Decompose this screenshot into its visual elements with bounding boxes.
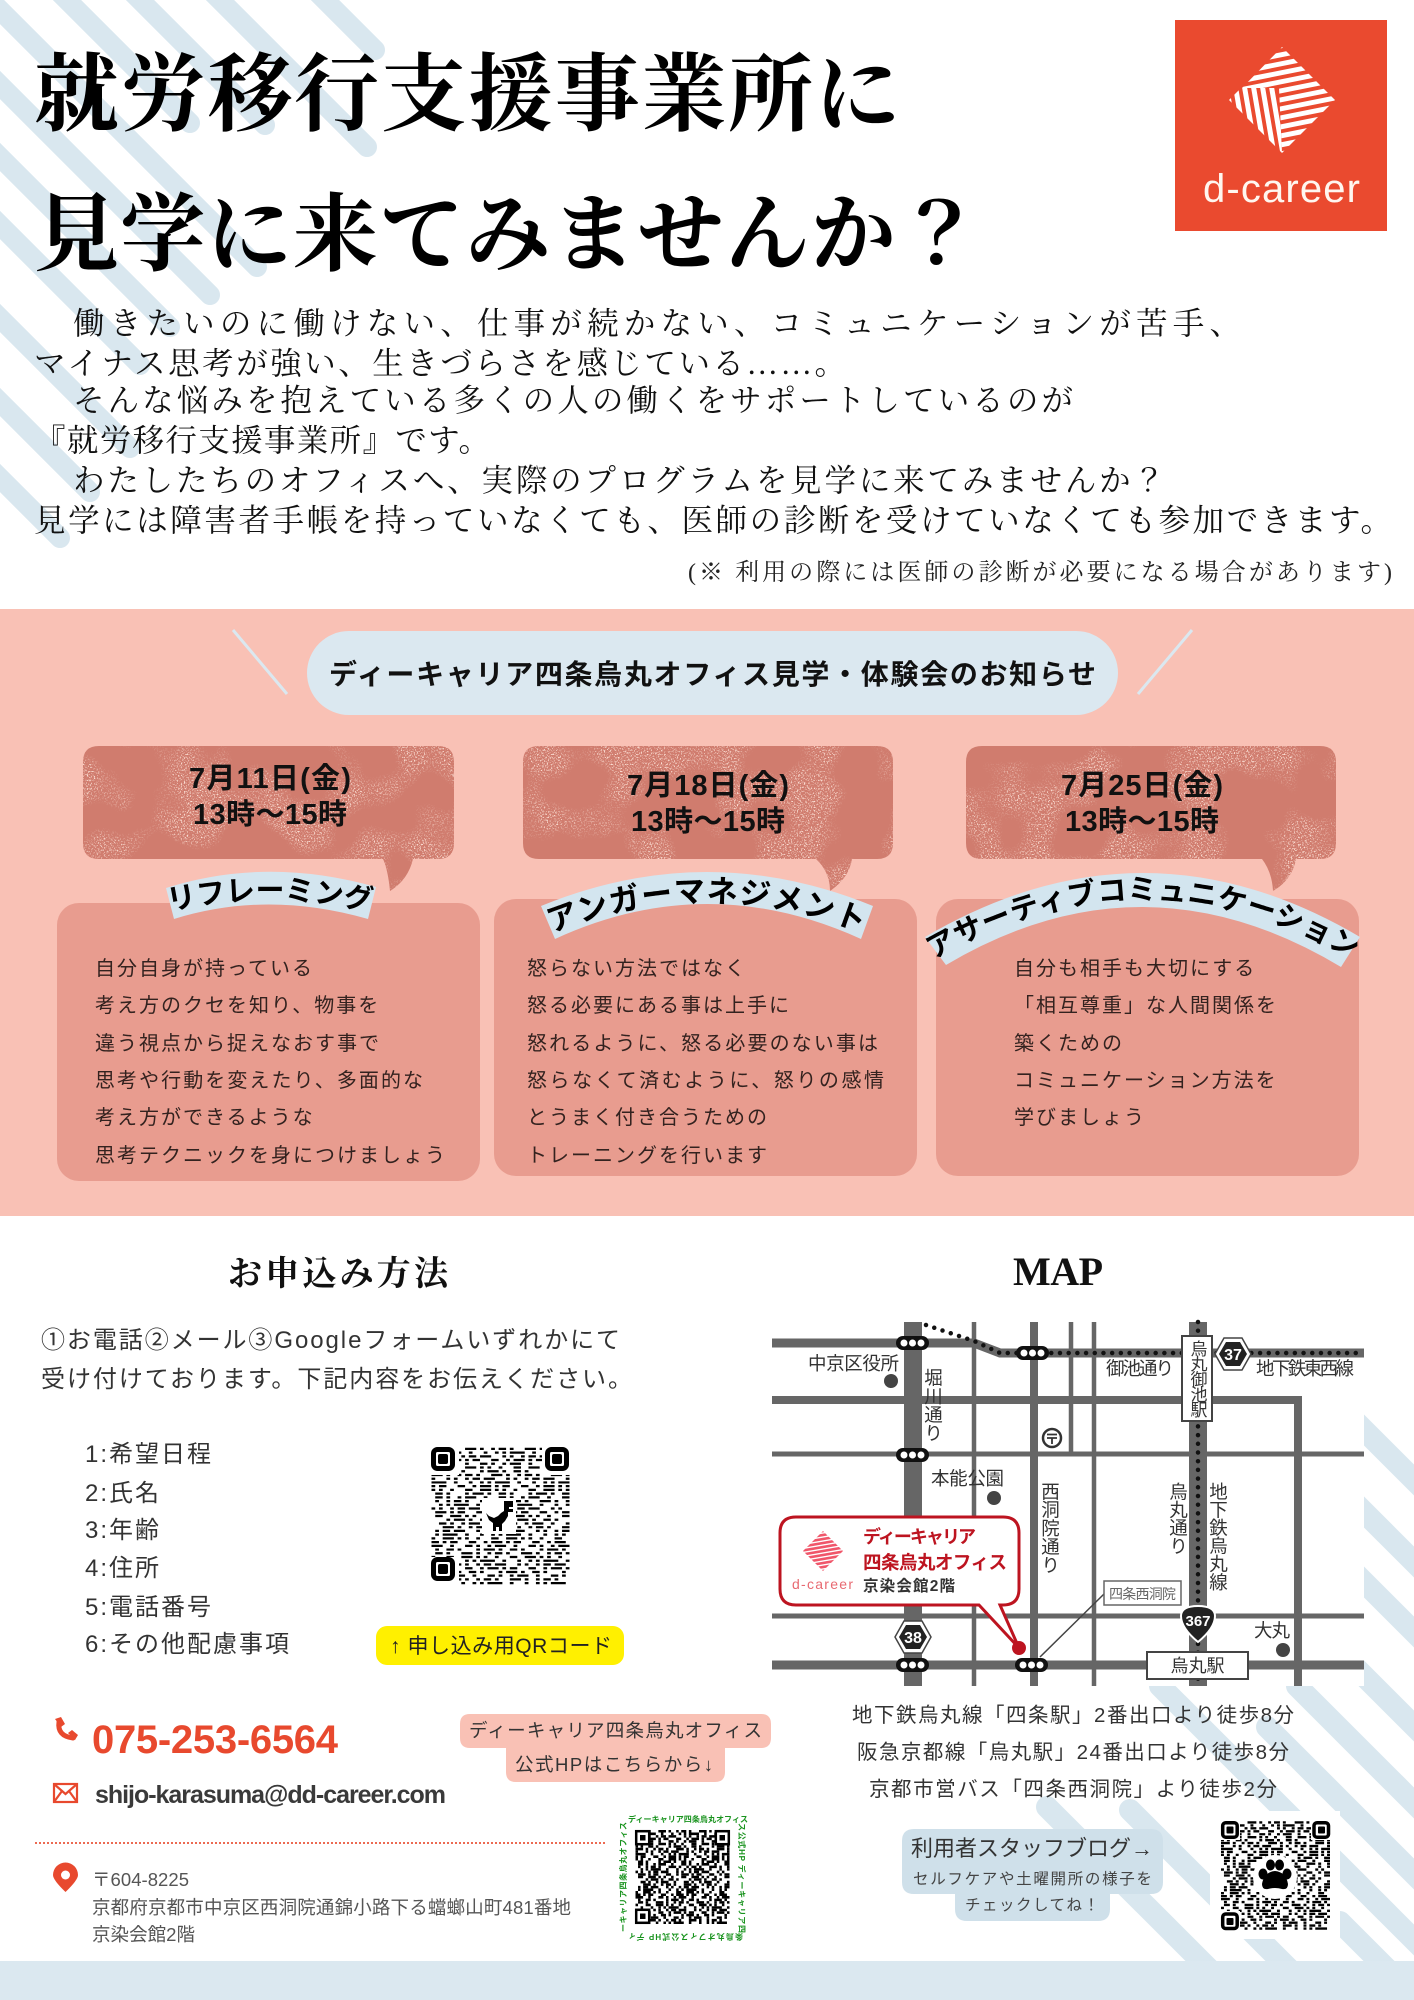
list of required details: 3:年齢 [85, 1517, 161, 1544]
date bubble 2 [520, 744, 900, 894]
list of required details: 2:氏名 [85, 1480, 161, 1507]
route marker 367 [1181, 1606, 1215, 1642]
callout: office location: 四条烏丸オフィス [863, 1552, 1007, 1573]
logo: d-career [1175, 20, 1387, 231]
title [34, 49, 982, 283]
icon: paw [1253, 1855, 1297, 1899]
route marker 37 [1215, 1338, 1251, 1370]
icon: dinosaur [486, 1501, 513, 1531]
apply instructions [41, 1327, 632, 1393]
blue tag: staff blog [902, 1829, 1163, 1921]
heading: how to apply: お申込み方法 [228, 1255, 451, 1293]
card text: 怒らない方法ではなく [527, 957, 747, 980]
heading: map: MAP [1013, 1249, 1103, 1294]
card 2: anger management [494, 872, 917, 1176]
card text: 怒らなくて済むように、怒りの感情 [527, 1069, 886, 1092]
date bubble 3 [960, 744, 1340, 894]
map labels: 堀川通り [922, 1368, 944, 1442]
QR code: official website with green frame text: ス公式HP ディーキャリア四 [737, 1823, 747, 1933]
dotted divider [35, 1842, 605, 1844]
card text: 怒る必要にある事は上手に [527, 994, 791, 1017]
card text: 「相互尊重」な人間関係を [1014, 994, 1278, 1017]
blue tag: staff blog: 利用者スタッフブログ→ [911, 1836, 1153, 1861]
pink tag: official website: ディーキャリア四条烏丸オフィス [469, 1720, 762, 1741]
footer band [0, 1961, 1414, 2000]
logo wordmark: d-career [1203, 167, 1360, 211]
phone number: 075-253-6564 [92, 1718, 339, 1762]
QR code: official website with green frame text [600, 1814, 748, 1942]
card text: 違う視点から捉えなおす事で [95, 1032, 381, 1055]
subway lines [926, 1322, 1364, 1686]
date bubble 2: 13時〜15時 [631, 805, 785, 838]
QR code: official website with green frame text: ディーキャリア四条烏丸オフィス [628, 1814, 748, 1824]
QR caption: yellow tag: ↑ 申し込み用QRコード [390, 1635, 612, 1658]
date bubble 3: 13時〜15時 [1065, 805, 1219, 838]
card text: コミュニケーション方法を [1014, 1069, 1278, 1092]
access directions: 地下鉄烏丸線「四条駅」2番出口より徒歩8分 [852, 1704, 1294, 1727]
route marker 367: 367 [1185, 1613, 1211, 1630]
ribbon: anger management: アンガーマネジメント [547, 876, 862, 932]
map labels: 大丸 [1254, 1620, 1290, 1641]
map labels: 西洞院通り [1040, 1482, 1060, 1574]
ribbon: assertive communication: アサーティブコミュニケーション [926, 876, 1358, 958]
callout: office location: d-career [792, 1576, 853, 1592]
card 3: assertive communication [925, 873, 1360, 1176]
card text: 自分自身が持っている [95, 957, 314, 980]
intro paragraph: わたしたちのオフィスへ、実際のプログラムを見学に来てみませんか？ [73, 463, 1165, 498]
landmarks [884, 1374, 1290, 1657]
QR code: official website with green frame text: 条烏丸オフィス公式HP ディ [628, 1932, 743, 1942]
address: 京都府京都市中京区西洞院通錦小路下る蟷螂山町481番地 [92, 1897, 571, 1918]
station label: Shijo Nishinotoin: 四条西洞院 [1109, 1586, 1176, 1602]
map labels: 地下鉄烏丸線 [1208, 1482, 1228, 1591]
stations [896, 1336, 1049, 1672]
route marker 38 [895, 1621, 931, 1653]
background: top-left diagonal stripes [0, 0, 375, 538]
card text: 思考や行動を変えたり、多面的な [95, 1069, 425, 1092]
card text: トレーニングを行います [527, 1144, 769, 1167]
card text: 築くための [1014, 1032, 1124, 1055]
map labels: 中京区役所 [808, 1353, 899, 1374]
icon: post office [1043, 1429, 1061, 1447]
intro paragraph: マイナス思考が強い、生きづらさを感じている……。 [34, 346, 846, 381]
address: 京染会館2階 [92, 1924, 195, 1945]
intro paragraph: 『就労移行支援事業所』です。 [34, 423, 490, 458]
date bubble 1 [80, 744, 460, 894]
station label: Karasuma: 烏丸駅 [1170, 1656, 1224, 1676]
intro paragraph [34, 306, 1392, 538]
panel: event schedule band [0, 609, 1414, 1216]
card text: とうまく付き合うための [527, 1106, 769, 1129]
QR code: official website with green frame text: ーキャリア四条烏丸オフィス [618, 1822, 628, 1932]
card text: 学びましょう [1014, 1106, 1146, 1129]
pink tag: official website [460, 1714, 771, 1782]
heading pill: ディーキャリア四条烏丸オフィス見学・体験会のお知らせ [329, 658, 1096, 690]
card text [95, 957, 447, 1167]
map labels [808, 1353, 1354, 1641]
QR code: staff blog [1180, 1811, 1340, 1939]
station label: Karasuma Oike [1182, 1336, 1212, 1421]
callout: office location: 京染会館2階 [863, 1577, 955, 1595]
map labels: 烏丸通り [1168, 1482, 1188, 1555]
card 1: reframing [57, 872, 480, 1181]
callout: office location: ディーキャリア [863, 1526, 976, 1547]
intro paragraph: 見学には障害者手帳を持っていなくても、医師の診断を受けていなくても参加できます。 [34, 503, 1392, 538]
blue tag: staff blog: チェックしてね！ [965, 1896, 1099, 1914]
card text: 考え方ができるような [95, 1106, 315, 1129]
email: shijo-karasuma@dd-career.com [95, 1781, 446, 1809]
icon: phone [59, 1722, 73, 1738]
list of required details: 1:希望日程 [85, 1441, 213, 1468]
date bubble 1: 13時〜15時 [193, 798, 347, 831]
background: bottom-right diagonal stripes [1047, 1406, 1414, 1972]
footnote: (※ 利用の際には医師の診断が必要になる場合があります) [688, 559, 1392, 586]
route marker 38: 38 [904, 1630, 922, 1647]
date bubble 3: 7月25日(金) [1061, 769, 1223, 802]
heading pill [233, 630, 1192, 715]
station label: Shijo Nishinotoin [1040, 1581, 1181, 1657]
date bubble 1: 7月11日(金) [189, 762, 351, 795]
title: 見学に来てみませんか？ [34, 189, 982, 283]
card text: 自分も相手も大切にする [1014, 957, 1256, 980]
QR code: application form [379, 1447, 570, 1585]
intro paragraph: そんな悩みを抱えている多くの人の働くをサポートしているのが [73, 383, 1073, 418]
card text: 考え方のクセを知り、物事を [95, 994, 380, 1017]
roads [772, 1322, 1364, 1686]
QR caption: yellow tag [376, 1626, 624, 1665]
route marker 37: 37 [1224, 1347, 1242, 1364]
list of required details: 5:電話番号 [85, 1594, 213, 1621]
address: 〒604-8225 [92, 1869, 189, 1890]
apply instructions: ①お電話②メール③Googleフォームいずれかにて [41, 1327, 620, 1354]
card text [1014, 957, 1278, 1129]
station label: Karasuma Oike: 烏丸御池駅 [1188, 1340, 1207, 1418]
intro paragraph: 働きたいのに働けない、仕事が続かない、コミュニケーションが苦手、 [73, 306, 1241, 341]
callout: office location [780, 1517, 1026, 1655]
card text: 思考テクニックを身につけましょう [95, 1144, 447, 1167]
list of required details [85, 1441, 291, 1658]
title: 就労移行支援事業所に [34, 49, 900, 143]
ribbon: reframing: リフレーミング [170, 878, 374, 910]
map [772, 1322, 1364, 1686]
access directions: 阪急京都線「烏丸駅」24番出口より徒歩8分 [857, 1741, 1290, 1764]
card text [527, 957, 886, 1167]
blue tag: staff blog: セルフケアや土曜開所の様子を [913, 1870, 1152, 1888]
access directions: 京都市営バス「四条西洞院」より徒歩2分 [869, 1778, 1278, 1801]
date bubble 2: 7月18日(金) [627, 769, 789, 802]
access directions [852, 1704, 1294, 1801]
apply instructions: 受け付けております。下記内容をお伝えください。 [41, 1366, 632, 1393]
pink tag: official website: 公式HPはこちらから↓ [515, 1754, 713, 1775]
card text: 怒れるように、怒る必要のない事は [527, 1032, 880, 1055]
map labels: 地下鉄東西線 [1256, 1358, 1354, 1379]
station label: Karasuma [1147, 1652, 1248, 1679]
icon: striped diamond [1229, 47, 1335, 153]
map labels: 本能公園 [931, 1468, 1004, 1489]
address [53, 1862, 571, 1945]
list of required details: 4:住所 [85, 1555, 161, 1582]
icon: map pin [53, 1862, 78, 1892]
icon: envelope [54, 1784, 77, 1802]
list of required details: 6:その他配慮事項 [85, 1631, 291, 1658]
map labels: 御池通り [1106, 1358, 1174, 1379]
